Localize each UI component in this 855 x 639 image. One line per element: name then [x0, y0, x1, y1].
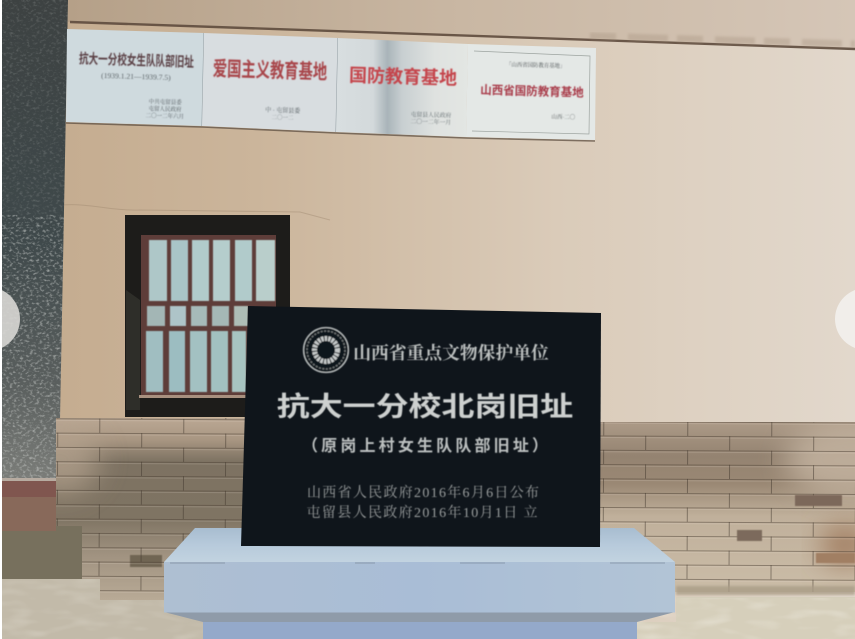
base upper face — [164, 528, 675, 562]
base front face — [164, 562, 675, 622]
announcement line: 山西省人民政府2016年6月6日公布 — [307, 484, 539, 501]
carousel button: next — [835, 288, 855, 350]
plaque 2: patriotism education base — [202, 33, 338, 132]
plaque 3: national defence education base — [336, 38, 468, 137]
window frame — [141, 235, 276, 397]
plaque 2: patriotism education base: 爱国主义教育基地 — [213, 57, 327, 83]
plaque 4: Shanxi national defence education base: 「山西省国防教育基地」 — [506, 60, 565, 70]
paved ground — [2, 579, 855, 639]
black stone marker — [241, 306, 601, 547]
subtitle: （原岗上村女生队队部旧址） — [302, 436, 548, 455]
base pedestal — [203, 620, 637, 639]
plaque 1: women's team headquarters: 二〇一二年六月 — [145, 111, 184, 120]
carousel button: previous — [0, 287, 20, 351]
plaque 1: women's team headquarters: (1939.1.21—1939.7.5) — [101, 71, 171, 82]
heading: provincial protected heritage unit: 山西省重点文物保护单位 — [353, 342, 549, 363]
upper wall band and ledge line — [68, 0, 855, 49]
left white edge — [0, 0, 2, 639]
emblem: cultural relics seal — [304, 328, 348, 372]
plaque shadow line — [66, 123, 595, 141]
window panes — [146, 240, 275, 392]
stone base — [164, 528, 675, 639]
plaque 2: patriotism education base: 中 · 屯留县委 — [265, 106, 300, 115]
window — [125, 215, 290, 417]
wall plaques — [66, 29, 596, 141]
plaque 4: Shanxi national defence education base — [466, 44, 596, 140]
plaque 2: patriotism education base: 二〇一二 — [271, 114, 294, 122]
plaque 3: national defence education base: 屯留县人民政府 — [411, 110, 452, 119]
plaque 3: national defence education base: 国防教育基地 — [349, 64, 457, 89]
brick wall base, left and right of the marker — [20, 418, 855, 600]
erection line: 屯留县人民政府2016年10月1日 立 — [306, 504, 538, 521]
site name: 抗大一分校北岗旧址 — [277, 393, 573, 422]
plaque 3: national defence education base: 二〇一二年一月 — [410, 117, 451, 126]
plaque 1: women's team headquarters: 中共屯留县委 — [149, 97, 182, 106]
left column base: red and olive patches — [2, 478, 82, 579]
left dark brick column — [2, 0, 68, 480]
plaque 4: Shanxi national defence education base: 山西省国防教育基地 — [480, 83, 584, 99]
plaque 1: women's team headquarters: 屯留人民政府 — [148, 104, 182, 113]
plaque 1: women's team headquarters: 抗大一分校女生队队部旧址 — [79, 49, 194, 70]
plaque 4: Shanxi national defence education base: 山西·二〇 — [551, 113, 576, 121]
plaque 1: women's team headquarters — [66, 29, 204, 126]
